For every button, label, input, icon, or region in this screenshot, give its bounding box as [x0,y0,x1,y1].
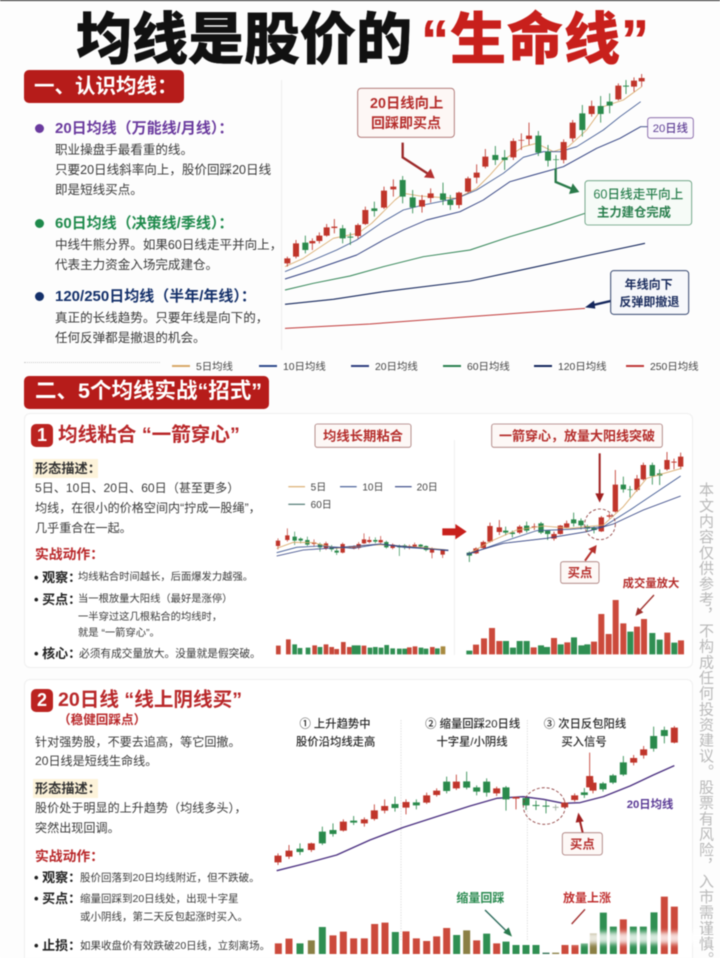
heading: section two [24,376,269,409]
arrow: rising volume [572,909,585,924]
bar chart: volume [278,897,674,954]
legend: moving average periods: 10日均线 [283,362,326,373]
legend: moving average periods: 60日均线 [467,362,510,373]
callout: 60-day flat and rising: 主力建仓完成 [597,205,671,220]
text block: pattern description: 股价处于明显的上升趋势（均线多头）， [35,801,247,815]
text block: 20-day line: 职业操盘手最看重的线。 [55,142,193,156]
legend: mini chart: 20日 [417,482,438,493]
label: 20-day line: 20日均线 [627,797,674,811]
text block: action list: 股价回落到20日均线附近，但不跌破。 [80,872,260,884]
text block: pattern description [34,801,247,834]
subheading: steady pullback: （稳健回踩点） [58,713,146,727]
legend: mini chart: 10日 [362,482,383,493]
text block: action list: • 买点： [34,592,81,607]
chart: moving averages overview [282,73,694,349]
callout: 20-day buy point: 20日线向上 [370,94,443,112]
label: pattern description: 形态描述： [35,461,101,476]
disclaimer: vertical watermark text: 本文内容仅供参考，不构成任何投资建议。股票有风险，入市需谨慎。 [696,482,717,958]
stage label 2: 十字星/小阴线 [436,734,508,748]
stage label 1: ① 上升趋势中 [299,717,371,731]
text block: action list [34,570,261,661]
legend: moving average periods: 5日均线 [196,362,233,373]
panel: tactic 1 [24,413,693,668]
label: buy point [562,833,602,855]
stage label 3 [544,717,626,748]
stage label 1 [296,717,375,748]
candlesticks [278,726,674,865]
text block: action list: • 止损： [34,938,81,953]
arrow: buy point [576,813,584,833]
legend: moving average periods: 250日均线 [650,362,699,373]
stage label 1: 股价沿均线走高 [296,734,375,748]
marker: dashed circle [585,509,615,540]
label: buy point: 买点 [570,836,595,851]
label: actions: 实战动作： [35,849,104,864]
text block: 20-day line: 即是短线买点。 [55,182,143,196]
text block: introduction: 针对强势股，不要去追高，等它回撤。 [35,734,241,748]
stage label 2 [425,717,520,748]
text block: introduction: 20日线是短线生命线。 [35,754,157,768]
text block: pattern description: 几乎重合在一起。 [35,521,132,535]
arrow: to annual line [585,301,611,309]
panel: tactic 2 [24,679,693,958]
text block: pattern description [34,481,261,535]
text block: 120/250-day line: 120/250日均线（半年/年线）： [55,288,256,305]
text block: action list: • 核心： [34,646,81,661]
text block: 20-day line: 20日均线（万能线/月线）： [55,120,233,136]
dotted separator [24,362,160,363]
20-day moving average line [277,766,674,871]
text block: 60-day line: 中线牛熊分界。如果60日线走平并向上， [55,238,282,252]
legend: mini chart [288,482,438,511]
text block: action list: 或小阴线，第二天反包起涨时买入。 [80,911,248,923]
badge: number 2: 2 [37,690,47,710]
text block: action list: 一半穿过这几根粘合的均线时， [78,612,222,622]
stage label 2: ② 缩量回踩20日线 [425,717,520,731]
stage label 3: ③ 次日反包阳线 [544,717,626,731]
legend: mini chart: 5日 [311,482,326,493]
text block: 120/250-day line: 真正的长线趋势。只要年线是向下的， [55,311,268,325]
arrow: shrinking volume [485,910,512,937]
badge: number 2 [31,689,53,712]
moving average lines [285,87,648,328]
legend: moving average periods [171,360,699,373]
label: shrinking volume pullback: 缩量回踩 [456,890,504,905]
text block: 120/250-day line: 任何反弹都是撤退的机会。 [55,331,206,345]
label: actions: 实战动作： [35,547,104,562]
callout: annual line heading down: 反弹即撤退 [619,294,679,309]
legend: moving average periods: 20日均线 [375,362,418,373]
label: pattern description: 形态描述： [35,781,101,796]
arrow: volume expansion [635,595,654,616]
arrow: to 60-day callout [556,168,579,194]
label: long-term convergence [315,424,411,447]
arrow: transition between charts [442,524,467,539]
text block: action list: 缩量回踩到20日线处，出现十字星 [80,893,239,905]
text block: 60-day line: 60日均线（决策线/季线）： [55,215,233,232]
legend: mini chart: 60日 [311,500,332,511]
arrow: buy point [585,545,597,561]
callout: 20-day buy point [358,88,454,137]
label: buy point: 买点 [568,565,592,580]
panel: moving average explanations [34,119,282,345]
bar chart: flat volume [278,639,443,654]
label: arrow through the heart [492,424,662,447]
callout: 60-day flat and rising [585,181,692,225]
candlestick chart: converged lines [277,528,448,558]
label: buy point [561,562,599,583]
badge: number 1: 1 [37,425,47,445]
text block: action list: • 观察： [34,870,81,885]
text block: action list: 均线粘合时间越长，后面爆发力越强。 [78,572,253,583]
chart: 20-day line pullback [274,716,679,955]
arrow: to pullback point [403,143,435,178]
text block: 60-day line: 代表主力资金入场完成建仓。 [55,258,218,272]
callout: 20-day line label: 20日线 [653,121,688,135]
text block: action list [34,870,270,953]
text block: introduction [34,734,241,768]
heading: section two: 二、5个均线实战“招式” [35,379,262,403]
legend: moving average periods: 120日均线 [558,362,607,373]
heading: section one [24,70,184,103]
text block: action list: • 观察： [34,570,81,585]
candlestick chart: breakout [467,452,682,562]
label: rising on volume: 放量上涨 [563,890,611,905]
marker: dashed circle [523,788,565,824]
callout: annual line heading down: 年线向下 [625,276,673,291]
heading: tactic 2: 20日线 “线上阴线买” [58,689,242,711]
text block: action list: • 买点： [34,891,81,906]
text block: 20-day line [34,119,272,196]
text block: pattern description: 5日、10日、20日、60日（甚至更多） [35,481,239,495]
text block: action list: 就是 “一箭穿心”。 [78,628,160,639]
callout: 20-day line label [648,118,693,138]
text block: action list: 如果收盘价有效跌破20日线，立刻离场。 [80,940,270,952]
callout: 20-day buy point: 回踩即买点 [371,115,441,131]
text block: 120/250-day line [34,287,268,345]
top edge line [0,0,720,1]
text block: pattern description: 均线，在很小的价格空间内“拧成一股绳”， [35,501,261,515]
text block: pattern description: 突然出现回调。 [35,820,120,834]
candlesticks [287,74,642,267]
charts: tactic 1 [275,422,685,656]
heading: section one: 一、认识均线： [34,75,178,98]
label: arrow through the heart: 一箭穿心，放量大阳线突破 [499,428,655,443]
callout: annual line heading down [611,271,689,314]
label: long-term convergence: 均线长期粘合 [323,427,404,443]
label: volume expansion: 成交量放大 [623,576,679,590]
text block: 60-day line [34,214,282,272]
bar chart: expanding volume [469,600,681,654]
arrow: breakout candle [595,453,604,503]
heading: tactic 1: 均线粘合 “一箭穿心” [58,424,240,446]
text block: 20-day line: 只要20日线斜率向上，股价回踩20日线 [55,162,271,176]
text block: action list: 必须有成交量放大。没量就是假突破。 [79,648,261,660]
callout: 60-day flat and rising: 60日线走平向上 [593,186,684,201]
title: 均线是股价的“生命线” [76,8,650,71]
stage label 3: 买入信号 [561,734,607,748]
text block: action list: 当一根放量大阳线（最好是涨停） [78,594,232,605]
badge: number 1 [31,424,53,447]
